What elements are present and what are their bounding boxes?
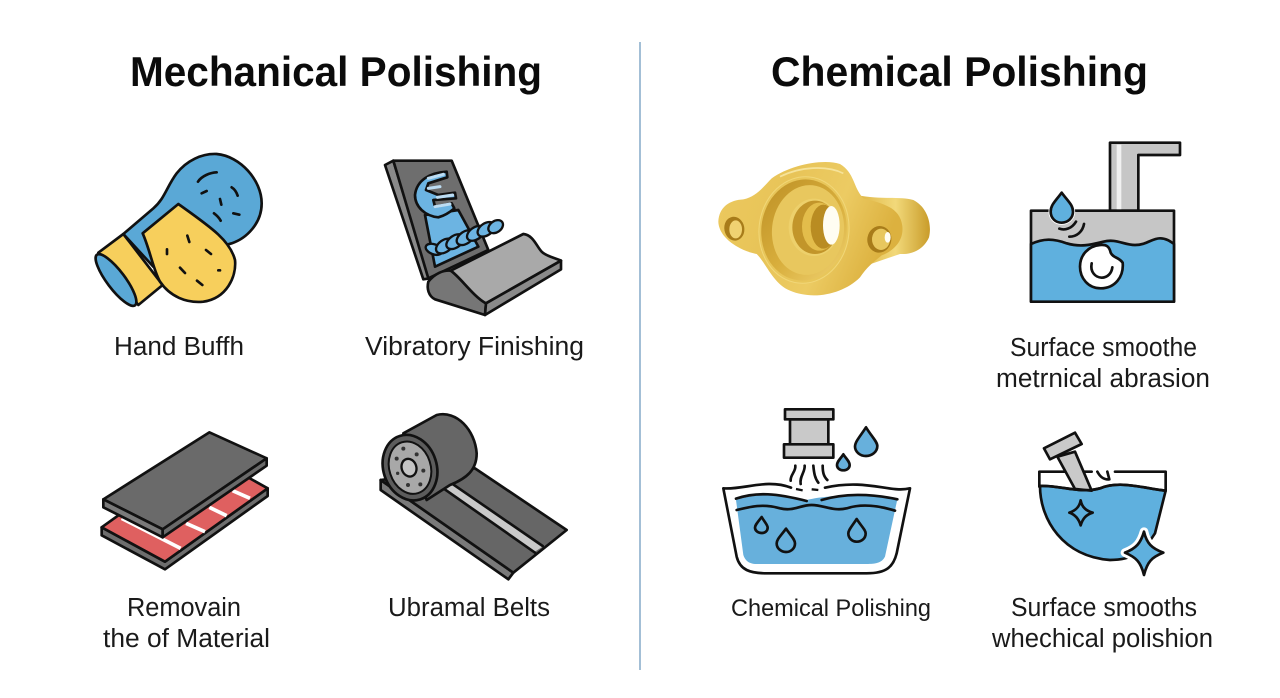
label: surface smoothed by mechanical abrasion — [996, 334, 1210, 393]
label: surface smooths by chemical polishing: whechical polishion — [991, 625, 1213, 653]
label: surface smooths by chemical polishing: Surface smooths — [1011, 594, 1197, 622]
label: surface smooths by chemical polishing — [991, 594, 1213, 653]
icon: material removal plates — [102, 432, 268, 569]
label: abrasive belts: Ubramal Belts — [388, 594, 550, 622]
center divider — [639, 42, 641, 670]
icon: brass flange part — [718, 162, 930, 295]
icon: vibratory finishing — [385, 161, 561, 315]
icon: faucet over tank — [1031, 143, 1180, 302]
label: surface smoothed by mechanical abrasion: Surface smoothe — [1010, 334, 1197, 362]
label: removal of material — [103, 594, 270, 653]
icon: hand buff — [90, 154, 262, 311]
panel: chemical polishing — [718, 48, 1213, 653]
icon: nozzle over chemical bath — [723, 409, 910, 573]
label: surface smoothed by mechanical abrasion: metrnical abrasion — [996, 365, 1210, 393]
panel: mechanical polishing — [90, 48, 584, 653]
icon: bowl with tool and sparkles — [1039, 433, 1166, 575]
label: hand buff: Hand Buffh — [114, 333, 244, 361]
label: removal of material: Removain — [127, 594, 241, 622]
label: chemical polishing: Chemical Polishing — [731, 595, 931, 622]
label: removal of material: the of Material — [103, 625, 270, 653]
label: vibratory finishing: Vibratory Finishing — [365, 333, 584, 361]
heading: chemical polishing: Chemical Polishing — [771, 48, 1148, 95]
heading: mechanical polishing: Mechanical Polishing — [130, 48, 542, 95]
icon: abrasive belt — [374, 414, 567, 579]
